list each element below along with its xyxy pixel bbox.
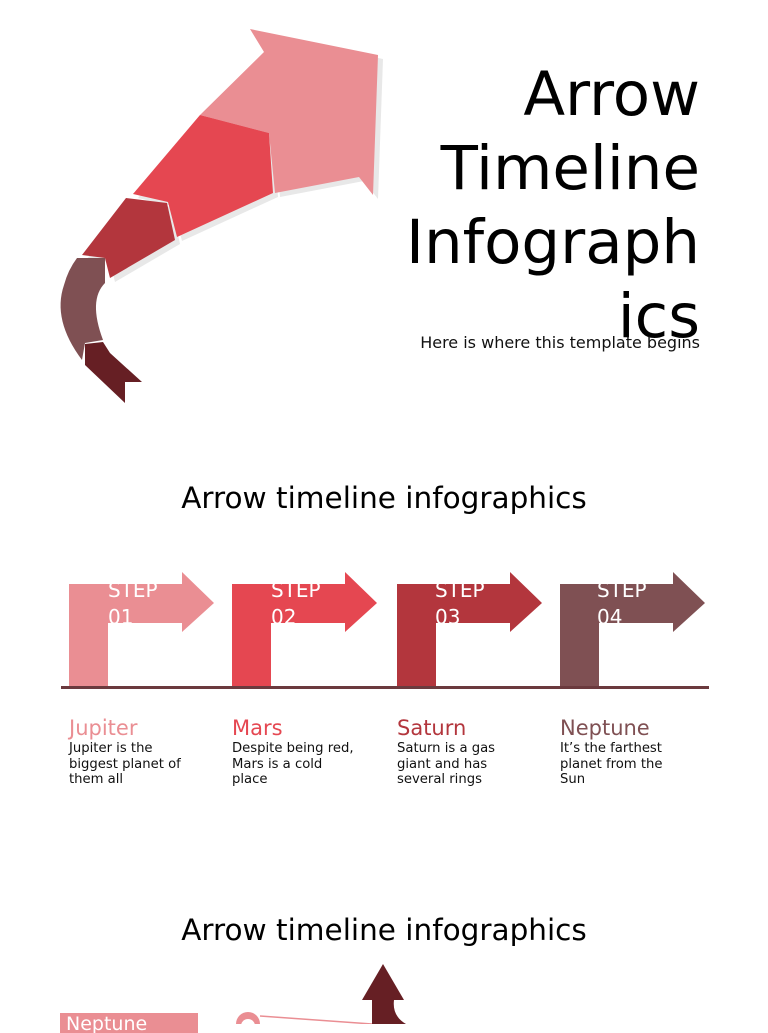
segment: red <box>133 115 273 237</box>
arrow 4 <box>560 572 705 687</box>
step labels: 01 <box>108 605 133 629</box>
item: Jupiter: Jupiter <box>69 716 137 740</box>
segment: mauve curve <box>61 258 105 360</box>
title: Arrow Timeline Infograph ics <box>406 59 700 352</box>
subtitle: Here is where this template begins <box>420 333 700 352</box>
step labels: STEP <box>108 578 158 602</box>
text: STEP <box>271 578 321 602</box>
segment: pink head <box>200 29 378 195</box>
numbered marker <box>236 1012 260 1033</box>
arrow 3 <box>397 572 542 687</box>
segment: dark tail <box>85 342 142 403</box>
arrow 1 <box>69 572 214 687</box>
text: Saturn is a gas giant and has several rings <box>397 741 495 787</box>
baseline <box>61 686 709 689</box>
section heading 1: Arrow timeline infographics <box>181 481 587 515</box>
label box: Neptune <box>60 1013 198 1033</box>
text: Jupiter is the biggest planet of them all <box>69 741 181 787</box>
bottom partial diagram <box>236 964 406 1024</box>
item: Saturn: Saturn <box>397 716 466 740</box>
text: STEP <box>435 578 485 602</box>
segment: dark red <box>82 198 175 278</box>
item: Neptune: Neptune <box>560 716 650 740</box>
arrow 2 <box>232 572 377 687</box>
hero arrow <box>60 29 383 403</box>
text: 03 <box>435 605 460 629</box>
text: It’s the farthest planet from the Sun <box>560 741 662 787</box>
text: 02 <box>271 605 296 629</box>
step arrows <box>61 572 709 689</box>
step labels <box>108 578 158 629</box>
text: 04 <box>597 605 622 629</box>
text: STEP <box>597 578 647 602</box>
connector line <box>260 1016 372 1024</box>
up arrow <box>362 964 406 1024</box>
section heading 2: Arrow timeline infographics <box>181 913 587 947</box>
item: Mars: Mars <box>232 716 283 740</box>
text: Despite being red, Mars is a cold place <box>232 741 354 787</box>
